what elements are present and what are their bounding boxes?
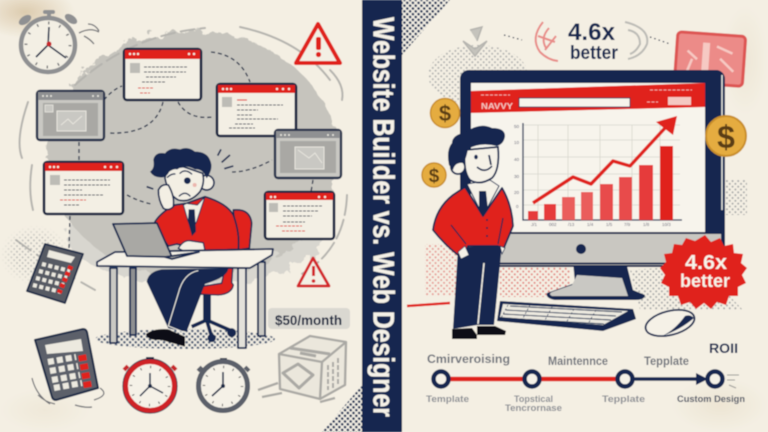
monitor (460, 70, 725, 300)
shirt collar and tie (183, 197, 205, 236)
halftone floor shadow (95, 329, 275, 349)
icon: upper calculator (27, 244, 83, 303)
dashed connectors (69, 52, 313, 248)
grid (523, 125, 680, 220)
red swirl (536, 22, 558, 61)
callout badge: starburst: better (680, 271, 730, 291)
stress marks (147, 149, 233, 189)
shirt and tie (467, 180, 499, 217)
upper labels: Maintennce (548, 354, 608, 368)
trousers (453, 244, 502, 329)
icon: gray clock (198, 358, 249, 410)
axis labels: 10/3 (662, 222, 671, 227)
stressed person at desk (146, 148, 252, 347)
red warning triangle small (298, 258, 329, 286)
central title band (362, 0, 402, 432)
icon: faded box (258, 336, 346, 402)
axis labels: 10 (514, 140, 520, 145)
hand on keyboard (178, 241, 205, 252)
timeline (426, 340, 745, 414)
halftone corner right of band (402, 0, 450, 55)
axis labels: 1/8 (643, 222, 650, 227)
axis labels: 7/9 (624, 222, 631, 227)
lower faded blob (67, 185, 323, 285)
browser header: NAVVY (481, 102, 514, 111)
screen (471, 83, 705, 232)
window: red lower right (265, 192, 334, 239)
halftone corner left of band (322, 385, 362, 432)
icon: dollar coin left top (430, 98, 460, 128)
price label (268, 308, 350, 329)
lower labels: Topstical (514, 394, 553, 405)
callout: 4.6x better (568, 19, 619, 64)
axis labels: /13 (568, 222, 575, 227)
axis labels: 002 (549, 222, 557, 227)
icon: lower calculator (32, 329, 104, 407)
halftone behind monitor (428, 45, 528, 105)
window: gray right (275, 130, 341, 178)
trouser highlight (478, 263, 484, 324)
axis (523, 123, 682, 220)
monitor chin (468, 234, 721, 265)
shoes (452, 326, 506, 339)
head (150, 148, 214, 201)
ROI label: ROII (709, 340, 738, 356)
dotted links to callout (504, 35, 670, 44)
red jumper (155, 197, 239, 251)
axis labels: 1/5 (606, 222, 613, 227)
window: red lower left (44, 162, 123, 214)
axis labels: 50 (514, 124, 520, 129)
icon: gray chevron (463, 27, 487, 56)
icon: dollar coin left top: $ (439, 101, 451, 126)
shoes (146, 329, 185, 347)
gray background blob (47, 31, 337, 279)
red jumper (433, 187, 513, 255)
upper labels: Tepplate (644, 354, 689, 368)
arm lines (451, 218, 503, 244)
icon: dollar coin right: $ (717, 119, 735, 155)
callout badge: starburst: 4.6x (685, 252, 727, 274)
chair (169, 210, 252, 342)
axis labels: 30 (514, 174, 520, 179)
lower labels: Tencrornase (505, 403, 562, 414)
axis labels: 0 (516, 204, 519, 209)
monitor stand (547, 262, 645, 300)
icon: top alarm clock (17, 10, 99, 72)
end tick marks (727, 375, 739, 388)
upper labels: Cmirveroising (427, 352, 510, 366)
red halftone behind person (425, 244, 570, 297)
sketch arcs around blob (16, 27, 347, 290)
navy halftone by monitor (630, 180, 747, 310)
trouser highlight (168, 271, 198, 333)
lower labels (426, 394, 745, 414)
lower labels: Tepplate (602, 394, 645, 405)
halftone left edge (5, 228, 63, 280)
timeline connectors (441, 373, 708, 385)
price label: $50/month (275, 313, 342, 328)
icon: dollar coin left lower (422, 163, 446, 187)
axis labels (514, 124, 671, 227)
lower labels: Custom Design (677, 394, 745, 405)
callout badge: starburst (660, 235, 747, 309)
panel: right, web designer ROI (407, 19, 747, 414)
keyboard (497, 301, 636, 331)
window: red right (217, 84, 296, 136)
axis labels: 1/4 (587, 222, 594, 227)
timeline nodes (434, 372, 722, 386)
desk (97, 249, 273, 348)
confident person (433, 126, 513, 339)
icon: red clock (123, 357, 177, 413)
power dot (576, 244, 586, 254)
window: gray left (37, 91, 104, 140)
title: Website Builder vs. Web Designer (367, 17, 401, 417)
laptop (113, 223, 199, 259)
trousers (147, 268, 228, 332)
window: red top centre (124, 49, 201, 100)
head (448, 126, 505, 183)
trend arrow (533, 116, 677, 203)
axis labels: J/1 (531, 222, 538, 227)
lower labels: Template (426, 394, 469, 405)
icon: large warning triangle (296, 24, 340, 63)
axis labels: 40 (514, 157, 520, 162)
callout: 4.6x better: 4.6x (568, 19, 616, 46)
monitor body (460, 70, 725, 267)
axis labels: 20 (514, 190, 520, 195)
chart (514, 116, 682, 227)
hand on cheek (158, 185, 174, 210)
cuffs (458, 246, 505, 259)
bars (528, 146, 673, 220)
red stamp (674, 32, 746, 86)
buttons (486, 219, 488, 237)
red accent stroke (407, 303, 450, 306)
mouse (643, 305, 697, 341)
icon: dollar coin right (706, 116, 746, 156)
icon: dollar coin left lower: $ (429, 166, 440, 187)
gray arcs (625, 22, 647, 59)
panel: left, website builder stress (0, 10, 350, 413)
upper labels (427, 352, 689, 368)
browser header (471, 83, 705, 113)
callout: 4.6x better: better (570, 43, 619, 64)
